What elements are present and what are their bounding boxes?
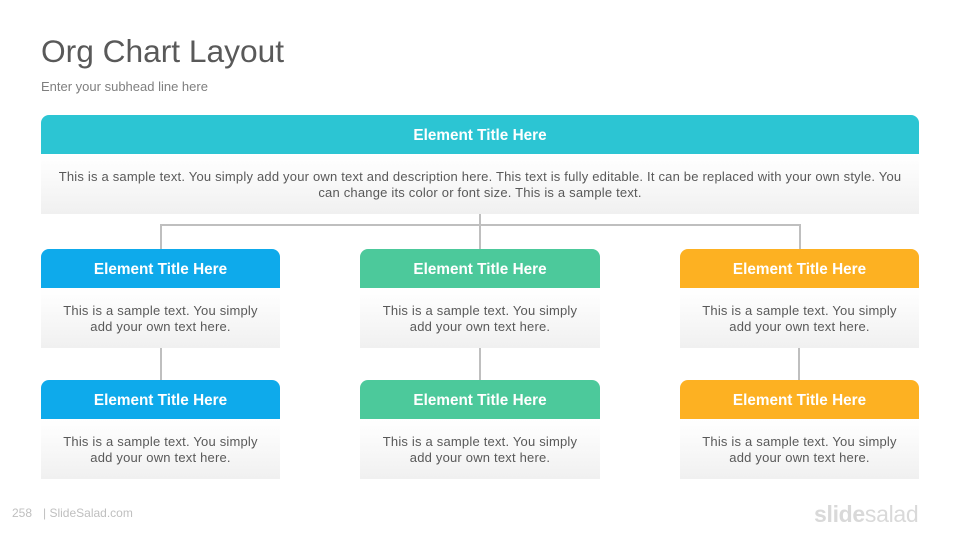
header [41, 249, 280, 288]
panel: top element [41, 115, 919, 214]
text: This is a sample text. You simply [383, 303, 577, 318]
text [680, 419, 919, 479]
text [41, 288, 280, 348]
header: Element Title Here [413, 261, 547, 278]
top element text: This is a sample text. You simply add your own text and description here. This text is fully editable. It can be replaced with your own style. You [59, 169, 901, 184]
panel: green card row 2 [360, 380, 600, 479]
text: add your own text here. [729, 450, 870, 465]
text: This is a sample text. You simply [702, 434, 897, 449]
panel: blue card row 2 [41, 380, 280, 479]
text: add your own text here. [410, 319, 550, 334]
top element header [41, 115, 919, 154]
top element header: Element Title Here [413, 127, 547, 144]
text: This is a sample text. You simply [383, 434, 577, 449]
footer source: | SlideSalad.com [43, 506, 133, 520]
header [680, 380, 919, 419]
text: add your own text here. [90, 319, 231, 334]
panel: orange card row 2 [680, 380, 919, 479]
panel: orange card row 1 [680, 249, 919, 348]
header: Element Title Here [94, 392, 227, 409]
header [41, 380, 280, 419]
header: Element Title Here [413, 392, 547, 409]
panel: green card row 1 [360, 249, 600, 348]
header: Element Title Here [733, 392, 866, 409]
text: add your own text here. [729, 319, 870, 334]
header [680, 249, 919, 288]
header: Element Title Here [733, 261, 866, 278]
text: add your own text here. [90, 450, 231, 465]
subhead: Enter your subhead line here [41, 79, 208, 94]
text [680, 288, 919, 348]
panel: blue card row 1 [41, 249, 280, 348]
logo wordmark: slidesalad [814, 501, 918, 527]
text: This is a sample text. You simply [63, 434, 258, 449]
header [360, 249, 600, 288]
text [360, 288, 600, 348]
text [41, 419, 280, 479]
page number: 258 [12, 506, 32, 520]
connector lines [160, 214, 801, 380]
text [360, 419, 600, 479]
top element text: can change its color or font size. This is a sample text. [318, 185, 642, 200]
text: This is a sample text. You simply [63, 303, 258, 318]
text: add your own text here. [410, 450, 550, 465]
header: Element Title Here [94, 261, 227, 278]
text: This is a sample text. You simply [702, 303, 897, 318]
title: Org Chart Layout [41, 33, 284, 69]
top element text [41, 154, 919, 214]
header [360, 380, 600, 419]
